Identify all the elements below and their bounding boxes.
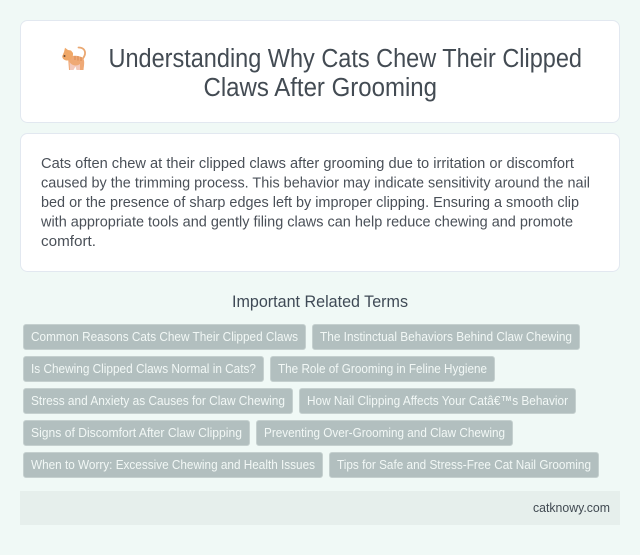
text block: description: bed or the presence of sharp edges left by improper clipping. Ensuring a smooth clip xyxy=(41,194,579,211)
panel: title card xyxy=(20,20,620,122)
text block: description xyxy=(40,155,590,250)
tag xyxy=(24,420,250,446)
tag xyxy=(270,356,494,382)
text block: description: with appropriate tools and gently filing claws can help reduce chewing and promote xyxy=(40,214,573,230)
tag xyxy=(300,388,576,414)
tag xyxy=(24,324,306,350)
tag xyxy=(24,356,264,382)
text block: description: Cats often chew at their clipped claws after grooming due to irritation or discomfort xyxy=(41,155,575,172)
title xyxy=(108,45,582,102)
tag xyxy=(330,452,598,478)
tag: When to Worry: Excessive Chewing and Health Issues xyxy=(31,457,315,472)
tag: Common Reasons Cats Chew Their Clipped Claws xyxy=(31,329,298,344)
footer source: catknowy.com xyxy=(533,500,610,515)
tag: Preventing Over-Grooming and Claw Chewing xyxy=(264,425,505,440)
tag xyxy=(312,324,580,350)
tag xyxy=(24,452,322,478)
tag: The Instinctual Behaviors Behind Claw Chewing xyxy=(320,329,572,344)
text block: description: comfort. xyxy=(41,233,96,250)
tag: Signs of Discomfort After Claw Clipping xyxy=(31,425,242,440)
tag xyxy=(256,420,512,446)
tag: Tips for Safe and Stress-Free Cat Nail Grooming xyxy=(337,457,591,472)
tag: How Nail Clipping Affects Your Catâ€™s Behavior xyxy=(307,393,569,408)
text block: description: caused by the trimming process. This behavior may indicate sensitivity around the nail xyxy=(41,174,590,192)
tag: Is Chewing Clipped Claws Normal in Cats? xyxy=(31,361,256,376)
tag: The Role of Grooming in Feline Hygiene xyxy=(278,361,487,376)
title: Claws After Grooming xyxy=(204,74,437,102)
icon: orange cat xyxy=(62,48,85,70)
tag list xyxy=(24,324,598,478)
panel: description xyxy=(20,134,620,272)
tag: Stress and Anxiety as Causes for Claw Chewing xyxy=(31,393,285,408)
tag xyxy=(24,388,292,414)
footer xyxy=(20,491,620,525)
heading: related terms: Important Related Terms xyxy=(232,293,408,311)
title: Understanding Why Cats Chew Their Clipped xyxy=(108,45,582,73)
